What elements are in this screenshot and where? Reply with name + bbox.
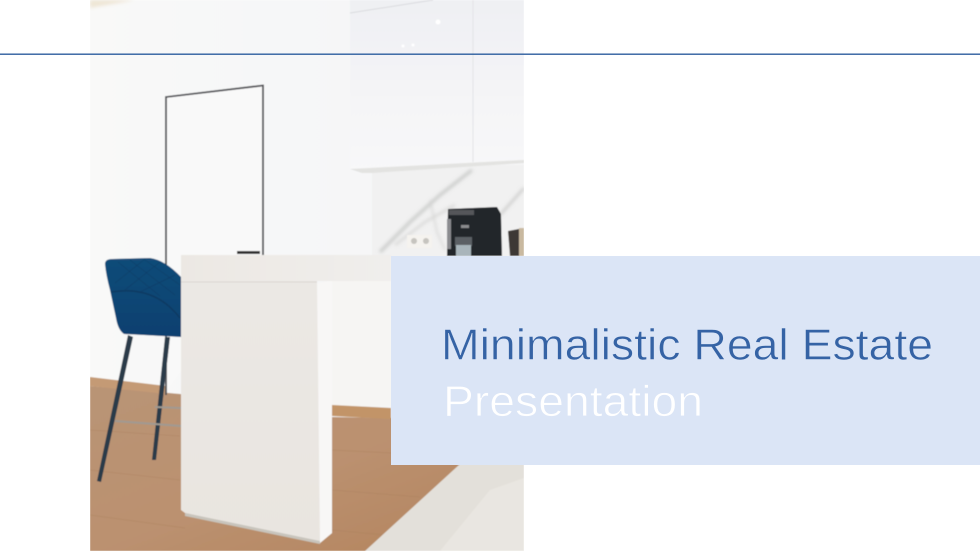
wall cabinets — [350, 0, 524, 173]
baseboard right — [332, 405, 391, 419]
title line 1: Minimalistic Real Estate — [441, 320, 933, 370]
title line 2: Presentation — [443, 377, 703, 426]
kitchen photo — [90, 0, 524, 551]
floor planks — [90, 430, 450, 535]
wall — [90, 0, 524, 420]
baseboard left — [90, 377, 166, 394]
power outlet — [407, 235, 430, 244]
coffee machine — [447, 207, 502, 256]
ceiling glow — [90, 0, 135, 8]
jar — [508, 228, 524, 256]
wall under counter — [332, 280, 391, 406]
title panel — [391, 256, 980, 465]
door — [166, 85, 263, 395]
table — [181, 255, 391, 544]
stool — [97, 258, 181, 482]
marble floor — [365, 464, 524, 551]
header rule — [0, 54, 980, 55]
marble backsplash — [372, 165, 524, 257]
floor — [90, 385, 460, 551]
